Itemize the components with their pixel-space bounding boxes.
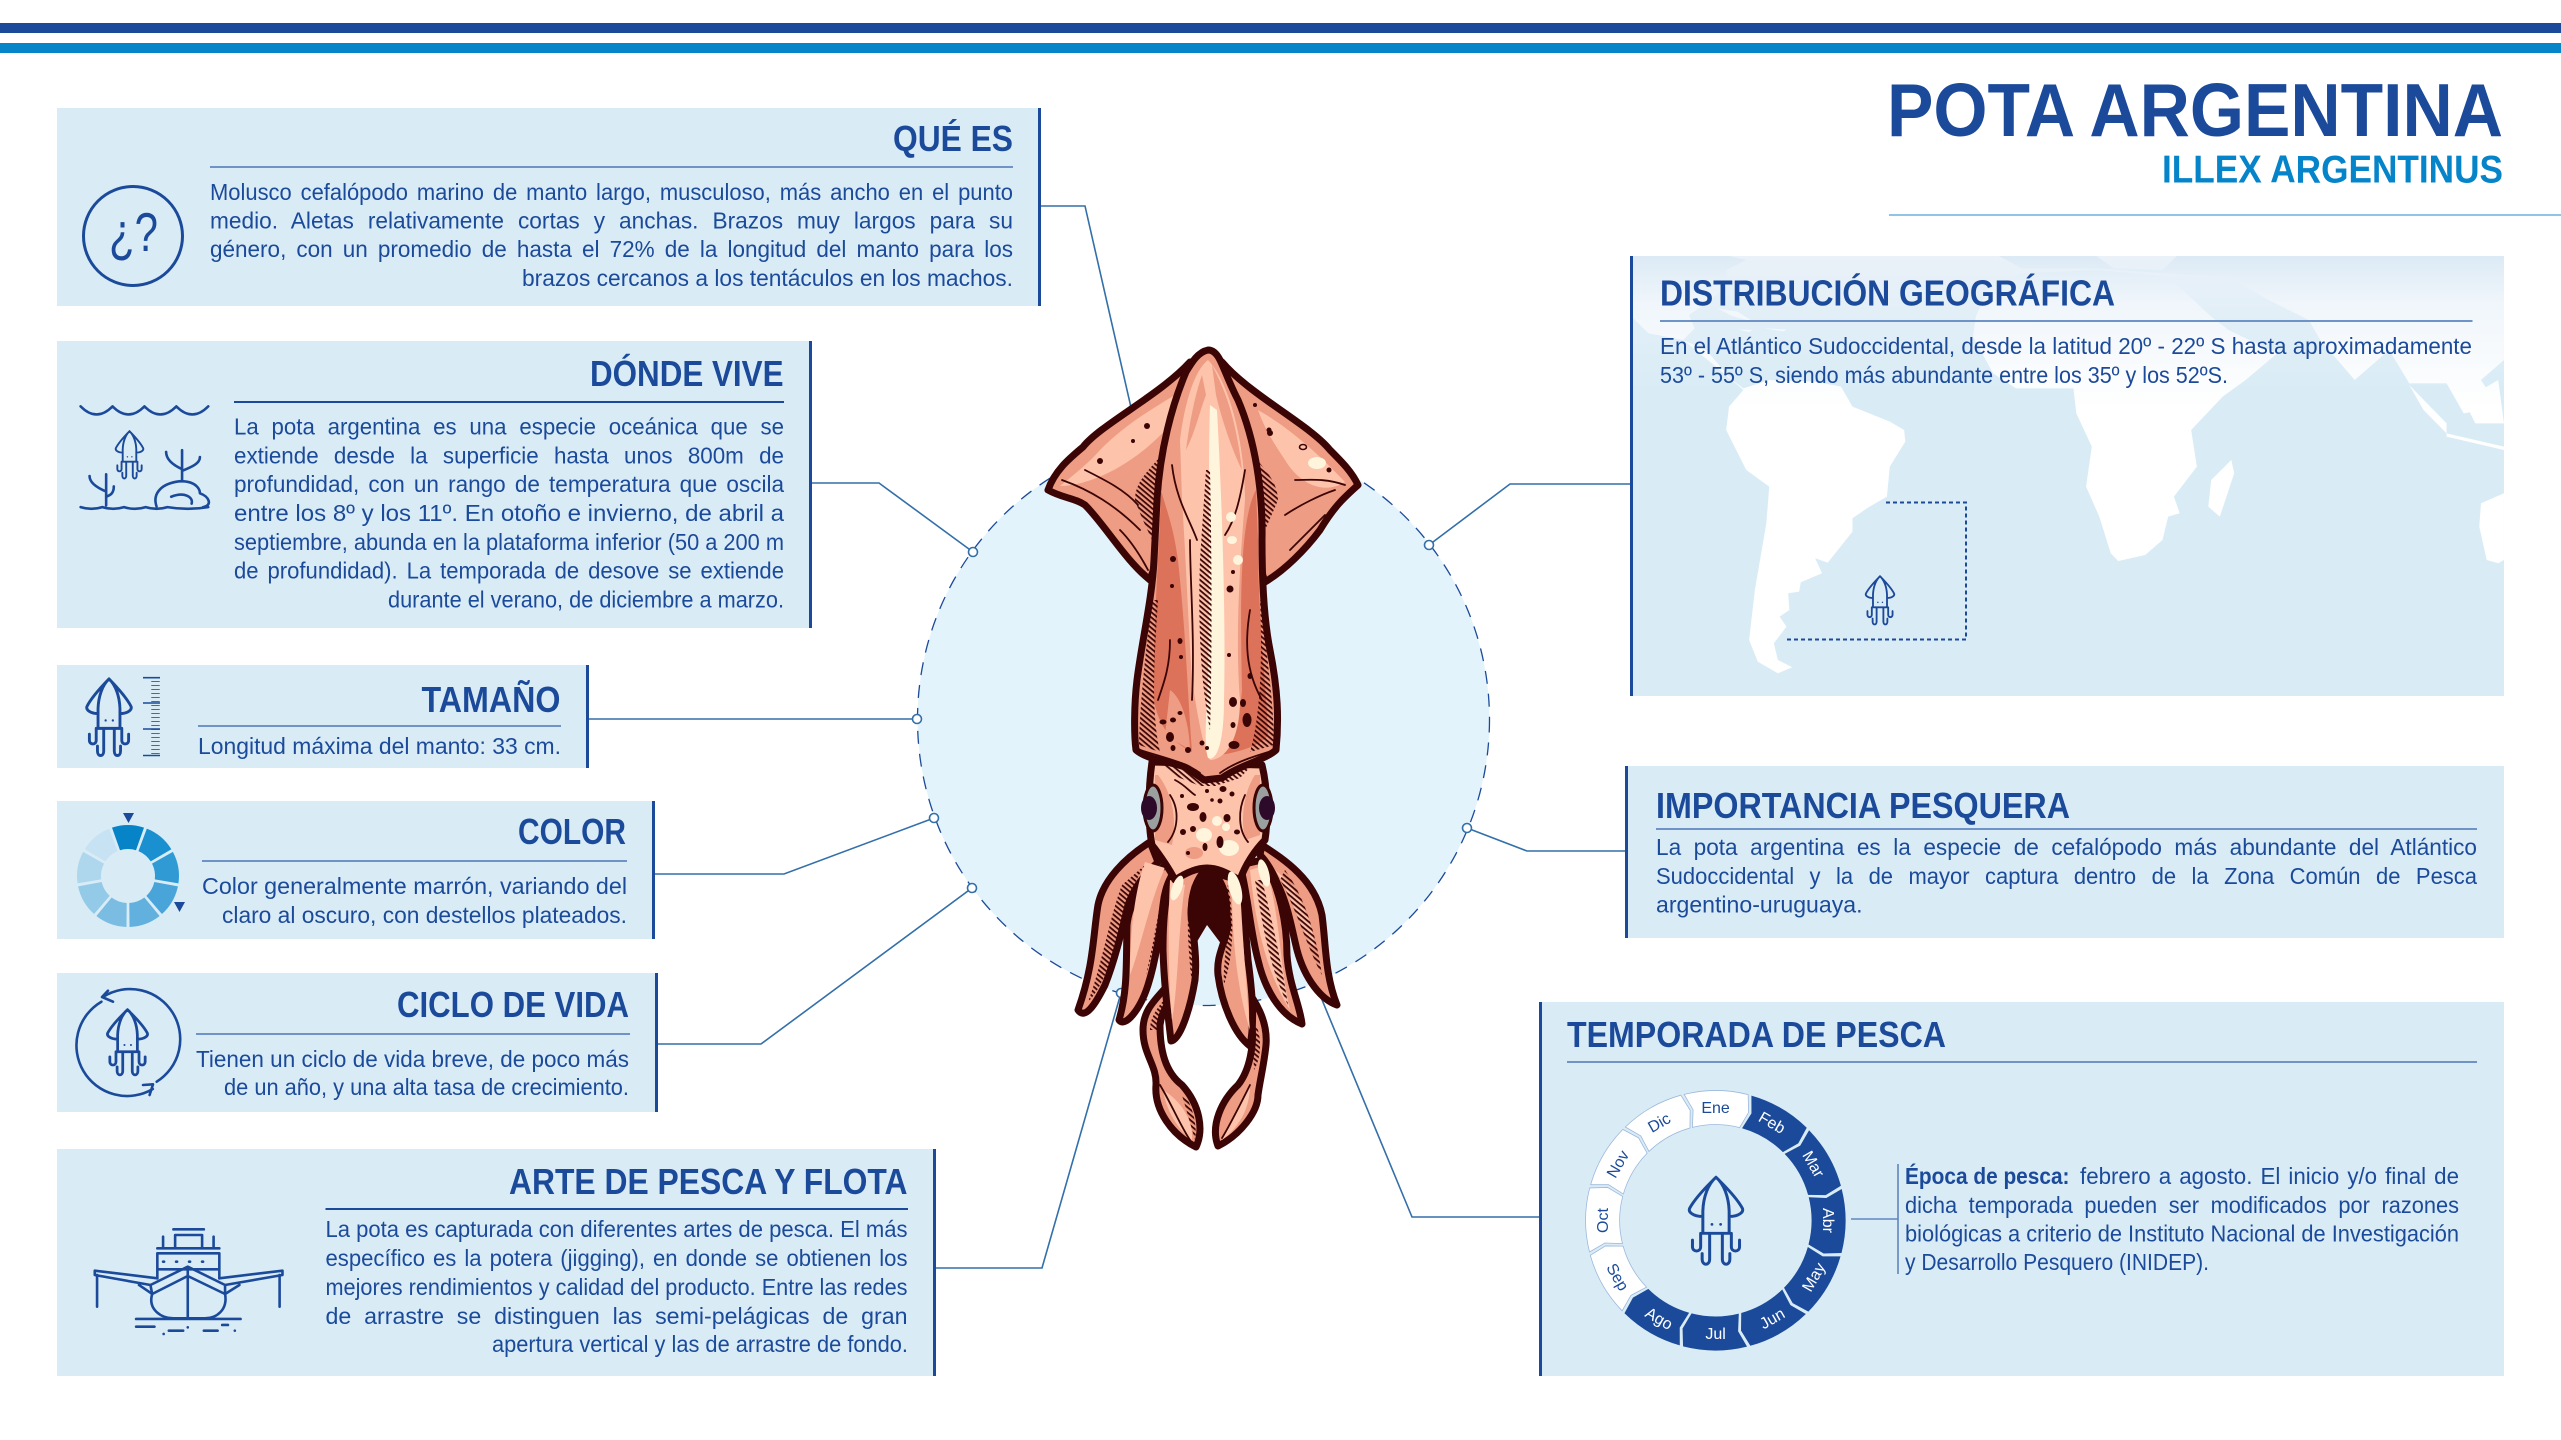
icon: squid in the sea (81, 406, 209, 509)
central circle (918, 434, 1490, 1006)
text block: qué es: género, con un promedio de hasta el 72% de la longitud del manto para los (210, 236, 1013, 262)
heading: distribución: DISTRIBUCIÓN GEOGRÁFICA (1660, 272, 2115, 314)
icon: question marks: ¿? (109, 201, 158, 263)
text block: arte de pesca: La pota es capturada con diferentes artes de pesca. El más (326, 1216, 908, 1242)
text block: arte de pesca: de arrastre se distinguen las semi-pelágicas de gran (326, 1303, 908, 1329)
text block: temporada (1905, 1162, 2459, 1275)
text block: arte de pesca: específico es la potera (jigging), en donde se obtienen los (326, 1245, 908, 1271)
panel: tamaño (57, 665, 589, 768)
subtitle: ILLEX ARGENTINUS (2162, 149, 2503, 192)
panel: importancia pesquera (1625, 766, 2504, 938)
text block: temporada: Época de pesca: (1905, 1162, 2070, 1189)
connectors (588, 206, 1630, 1268)
text block: distribución (1660, 333, 2472, 388)
chart: fishing calendar: Mar (1798, 1148, 1827, 1181)
eyes (1141, 785, 1275, 831)
panel: color (57, 801, 655, 939)
text block: dónde vive: durante el verano, de diciembre a marzo. (388, 586, 784, 612)
text block: qué es (210, 179, 1013, 291)
text block: dónde vive (234, 414, 785, 612)
text block: ciclo de vida: Tienen un ciclo de vida breve, de poco más (196, 1046, 629, 1072)
text block: distribución: En el Atlántico Sudoccidental, desde la latitud 20º - 22º S hasta aproximadamente (1660, 333, 2472, 359)
chart: fishing calendar: Sep (1602, 1261, 1631, 1294)
chart: fishing calendar: Oct (1595, 1208, 1612, 1233)
panel: dónde vive (57, 341, 812, 628)
text block: temporada: febrero a agosto. El inicio y/o final de (2080, 1163, 2459, 1189)
panel: distribución geográfica (1630, 256, 2504, 696)
chart: fishing calendar: Ene (1701, 1100, 1730, 1117)
chart: fishing calendar: Feb (1755, 1109, 1788, 1138)
mantle (1135, 350, 1278, 780)
chart: fishing calendar: Jul (1705, 1326, 1726, 1343)
icon: question marks (84, 186, 182, 286)
text block: dónde vive: septiembre, abunda en la plataforma inferior (50 a 200 m (234, 529, 784, 555)
text block: importancia: argentino-uruguaya. (1656, 892, 1862, 918)
callout line (1851, 1164, 1898, 1274)
panel: arte de pesca y flota (57, 1149, 936, 1376)
heading: arte de pesca: ARTE DE PESCA Y FLOTA (509, 1161, 908, 1202)
chart: fishing calendar: Ago (1642, 1305, 1675, 1334)
text block: temporada: dicha temporada pueden ser modificados por razones (1905, 1192, 2459, 1218)
chart: fishing calendar: Dic (1645, 1110, 1674, 1137)
fins (1048, 362, 1358, 582)
text block: dónde vive: La pota argentina es una especie oceánica que se (234, 414, 784, 440)
arms (1078, 842, 1337, 1046)
icon: colour wheel (75, 813, 185, 929)
text block: dónde vive: de profundidad). La temporada de desove se extiende (234, 558, 784, 584)
icon: squid (1689, 1177, 1743, 1264)
text block: ciclo de vida (196, 1046, 629, 1100)
top stripes (0, 23, 2561, 53)
text block: dónde vive: profundidad, con un rango de temperatura que oscila (234, 471, 785, 497)
text block: qué es: medio. Aletas relativamente cortas y anchas. Brazos muy largos para su (210, 208, 1013, 234)
panel: qué es (57, 108, 1041, 306)
heading: importancia: IMPORTANCIA PESQUERA (1656, 785, 2070, 826)
heading: temporada: TEMPORADA DE PESCA (1567, 1014, 1946, 1055)
text block: tamaño: Longitud máxima del manto: 33 cm. (198, 733, 561, 759)
illustration: squid (1048, 350, 1358, 1147)
head (1149, 762, 1272, 945)
panel: ciclo de vida (57, 973, 658, 1112)
text block: color (202, 873, 627, 928)
heading: color: COLOR (518, 811, 626, 852)
heading: dónde vive: DÓNDE VIVE (590, 352, 784, 394)
text block: dónde vive: extiende desde la superficie hasta unos 800m de (234, 442, 784, 468)
chart: fishing calendar (1586, 1090, 1846, 1351)
world map (1631, 256, 2504, 673)
text block: temporada: biológicas a criterio de Instituto Nacional de Investigación (1905, 1221, 2459, 1247)
heading: qué es: QUÉ ES (893, 118, 1013, 159)
title (1887, 68, 2561, 216)
text block: distribución: 53º - 55º S, siendo más abundante entre los 35º y los 52ºS. (1660, 362, 2228, 388)
chart: fishing calendar: Nov (1604, 1148, 1633, 1181)
chart: fishing calendar: May (1799, 1260, 1829, 1295)
title: POTA ARGENTINA (1887, 68, 2503, 152)
text block: arte de pesca: mejores rendimientos y calidad del producto. Entre las redes (326, 1274, 908, 1300)
text block: qué es: brazos cercanos a los tentáculos en los machos. (522, 265, 1013, 291)
chart: fishing calendar: Abr (1819, 1208, 1836, 1234)
text block: importancia: Sudoccidental y la de mayor captura dentro de la Zona Común de Pesca (1656, 863, 2478, 889)
text block: importancia: La pota argentina es la especie de cefalópodo más abundante del Atlántico (1656, 834, 2477, 860)
icon: life cycle (76, 989, 180, 1096)
chart: fishing calendar: Jun (1757, 1305, 1788, 1333)
map marker: distribution area (1785, 502, 1966, 640)
text block: ciclo de vida: de un año, y una alta tasa de crecimiento. (224, 1074, 629, 1100)
heading: ciclo de vida: CICLO DE VIDA (397, 984, 629, 1025)
text block: temporada: y Desarrollo Pesquero (INIDEP). (1905, 1249, 2209, 1275)
text block: qué es: Molusco cefalópodo marino de manto largo, musculoso, más ancho en el punto (210, 179, 1013, 205)
icon: squid with ruler (87, 677, 160, 757)
panel: temporada de pesca (1539, 1002, 2504, 1376)
icon: fishing boat (95, 1229, 282, 1334)
text block: color: Color generalmente marrón, variando del (202, 873, 627, 899)
long tentacles (1143, 985, 1266, 1147)
text block: importancia (1656, 834, 2478, 918)
text block: arte de pesca (326, 1216, 908, 1357)
heading: tamaño: TAMAÑO (422, 678, 560, 720)
text block: color: claro al oscuro, con destellos plateados. (222, 902, 627, 928)
text block: arte de pesca: apertura vertical y las de arrastre de fondo. (492, 1331, 908, 1357)
text block: dónde vive: entre los 8º y los 11º. En otoño e invierno, de abril a (234, 500, 785, 526)
